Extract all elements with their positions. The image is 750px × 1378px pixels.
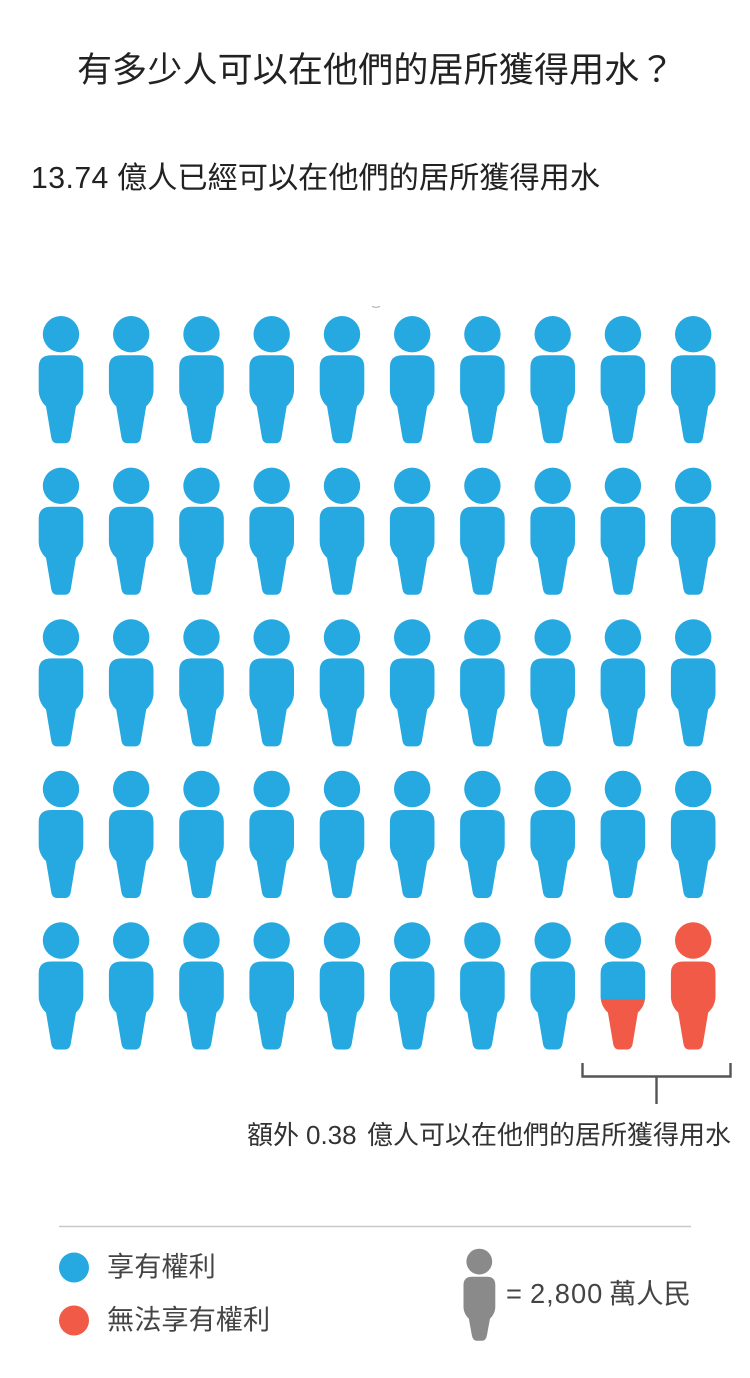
legend panel	[59, 1226, 691, 1341]
legend: unit value: 萬人民	[609, 1278, 691, 1309]
icon: grey person unit	[464, 1249, 495, 1341]
bracket	[582, 1063, 730, 1104]
row 2 of people	[39, 468, 715, 595]
callout: additional people: 0.38	[306, 1120, 357, 1150]
subtitle: people with water at home: 13.74	[31, 162, 109, 195]
row 3 of people	[39, 619, 715, 746]
callout: additional people: 額外	[247, 1120, 299, 1150]
legend: has right: 享有權利	[107, 1251, 216, 1282]
row 5 of people: blue	[39, 922, 575, 1050]
red person	[671, 922, 716, 1050]
legend: unit value: 2,800	[530, 1278, 603, 1309]
title: 有多少人可以在他們的居所獲得用水？	[77, 51, 675, 90]
subtitle: people with water at home: 億人已經可以在他們的居所獲得用水	[117, 161, 600, 195]
legend: has right	[59, 1251, 216, 1282]
row 4 of people	[39, 771, 715, 898]
callout: additional people: 億人可以在他們的居所獲得用水	[367, 1120, 731, 1150]
legend: unit value: =	[506, 1278, 522, 1309]
partly filled person	[601, 922, 645, 1050]
row 1 of people	[39, 316, 715, 443]
legend: no right: 無法享有權利	[107, 1304, 270, 1335]
pictogram chart: 50 people	[39, 316, 715, 1050]
